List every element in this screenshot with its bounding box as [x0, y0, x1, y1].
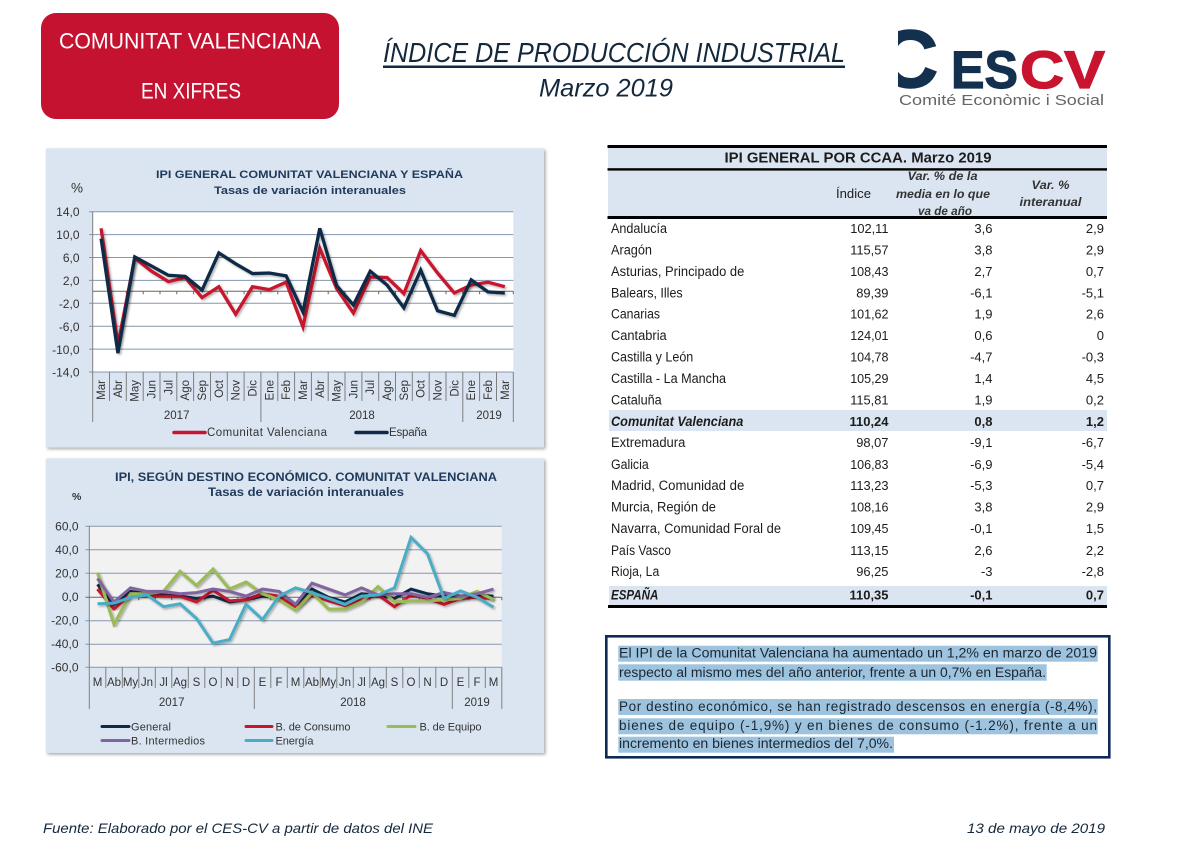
- y axis labels: -2,0: [59, 297, 80, 311]
- month labels: Oct: [416, 379, 428, 398]
- region names: Comunitat Valenciana: [611, 414, 744, 429]
- callout: summary text: respecto al mismo mes del año anterior, frente a un 0,7% en España.: [619, 665, 1046, 680]
- legend: General: [131, 722, 171, 734]
- year labels: 2018: [349, 410, 375, 422]
- footer: date: 13 de mayo de 2019: [967, 820, 1105, 836]
- year labels: 2019: [476, 410, 502, 422]
- year labels: 2019: [464, 697, 490, 709]
- panel: IPI general chart: [46, 148, 544, 448]
- table header: [608, 145, 1107, 219]
- legend: Energía: [276, 736, 314, 748]
- year labels: [164, 410, 502, 422]
- table bottom rule: [608, 605, 1107, 608]
- column: variación interanual: 0: [1097, 328, 1104, 343]
- callout: summary text: [606, 636, 1109, 757]
- column: variación interanual: 2,6: [1086, 306, 1104, 322]
- year labels: [159, 697, 490, 709]
- month labels: Abr: [315, 380, 327, 398]
- column: variación interanual: -5,1: [1082, 286, 1104, 300]
- column: variación media: -3: [981, 564, 992, 579]
- column: índice: 124,01: [850, 328, 888, 343]
- column: índice: 102,11: [850, 221, 888, 236]
- month labels: F: [473, 677, 481, 689]
- line: España: [101, 228, 505, 353]
- month labels: Ab: [305, 677, 319, 689]
- panel: IPI por destino económico chart: [46, 458, 544, 753]
- chart heading: IPI GENERAL COMUNITAT VALENCIANA Y ESPAÑA: [156, 168, 463, 181]
- region names: Cataluña: [611, 392, 662, 408]
- column: variación media: 3,8: [974, 242, 992, 258]
- column: variación interanual: -0,3: [1082, 350, 1104, 364]
- y axis labels: -14,0: [52, 366, 80, 380]
- month labels: Dic: [449, 380, 461, 397]
- column: variación media: -6,1: [970, 286, 992, 300]
- legend: [102, 722, 482, 748]
- column: índice: 115,57: [850, 242, 888, 258]
- column: variación media: 1,9: [974, 306, 992, 322]
- column: índice: 113,23: [850, 478, 888, 493]
- legend: [174, 427, 428, 439]
- month labels: May: [130, 380, 142, 402]
- footer: source: Fuente: Elaborado por el CES-CV a partir de datos del INE: [43, 820, 434, 836]
- month labels: My: [123, 677, 138, 689]
- chart heading: Tasas de variación interanuales: [208, 487, 404, 499]
- logo: CES CV: CV: [1020, 41, 1105, 100]
- month labels: Jl: [159, 677, 168, 689]
- callout: summary text: Por destino económico, se han registrado descensos en energía (-8,4%),: [619, 699, 1097, 714]
- month labels: Sep: [197, 380, 209, 400]
- month labels: Jn: [141, 677, 153, 689]
- column: variación interanual: 1,2: [1086, 414, 1104, 429]
- column: variación interanual: 4,5: [1086, 371, 1104, 386]
- month labels: O: [407, 677, 416, 689]
- table header: IPI GENERAL POR CCAA. Marzo 2019: [724, 150, 992, 166]
- month labels: Feb: [483, 380, 495, 400]
- column: variación interanual: 2,9: [1086, 221, 1104, 236]
- y axis labels: -20,0: [51, 614, 79, 628]
- month labels: Ab: [107, 677, 121, 689]
- badge: Comunitat Valenciana en xifres: COMUNITAT VALENCIANA: [59, 28, 321, 54]
- column: variación media: 1,4: [974, 371, 992, 386]
- column: variación media: 3,8: [974, 500, 992, 515]
- month labels: Oct: [214, 379, 226, 398]
- region names: Aragón: [611, 242, 652, 258]
- column: variación interanual: 2,9: [1086, 500, 1104, 515]
- legend: B. de Equipo: [420, 722, 482, 734]
- logo: CES CV: Comité Econòmic i Social: [899, 93, 1104, 109]
- table header: media en lo que: [896, 187, 990, 201]
- column: índice: [850, 221, 889, 602]
- month labels: E: [457, 677, 465, 689]
- column: variación interanual: -5,4: [1082, 457, 1104, 472]
- y axis labels: -6,0: [59, 320, 80, 334]
- column: índice: 113,15: [850, 543, 888, 558]
- month labels: Ago: [180, 380, 192, 400]
- month labels: Jul: [365, 380, 377, 395]
- legend: Comunitat Valenciana: [207, 427, 328, 439]
- month labels: [96, 379, 512, 402]
- month labels: Jun: [348, 380, 360, 399]
- column: variación media: -0,1: [970, 521, 992, 536]
- month labels: Abr: [113, 380, 125, 398]
- column: variación interanual: 0,2: [1086, 392, 1104, 408]
- region names: Castilla y León: [611, 350, 693, 364]
- month labels: May: [332, 380, 344, 402]
- month labels: Mar: [96, 380, 108, 400]
- column: variación media: 2,6: [974, 543, 992, 558]
- chart heading: [71, 168, 463, 197]
- y axis labels: -10,0: [52, 343, 80, 357]
- line: B. de Consumo: [98, 589, 494, 609]
- column: variación interanual: 0,7: [1086, 587, 1104, 602]
- column: variación interanual: 0,7: [1086, 264, 1104, 279]
- region names: Extremadura: [611, 435, 686, 450]
- column: variación interanual: -6,7: [1082, 435, 1104, 450]
- legend: España: [389, 427, 428, 439]
- column: variación media: 2,7: [974, 264, 992, 279]
- region names: Navarra, Comunidad Foral de: [611, 521, 781, 536]
- logo: CES CV: ES: [951, 41, 1018, 100]
- panel: table IPI general por CCAA: [608, 145, 1107, 608]
- chart heading: Tasas de variación interanuales: [214, 185, 406, 197]
- region names: Madrid, Comunidad de: [611, 478, 744, 493]
- region names: Murcia, Región de: [611, 500, 716, 515]
- callout: summary text: incremento en bienes intermedios del 7,0%.: [619, 736, 893, 751]
- y axis labels: 10,0: [56, 228, 80, 242]
- column: variación interanual: 0,7: [1086, 478, 1104, 493]
- month labels: Jun: [147, 380, 159, 399]
- year labels: 2017: [164, 410, 189, 422]
- month labels: M: [291, 677, 300, 689]
- column: variación media: [970, 221, 992, 602]
- y axis labels: [51, 520, 79, 674]
- logo: CES CV: C: [879, 14, 938, 105]
- region names: Castilla - La Mancha: [611, 371, 726, 386]
- column: índice: 106,83: [850, 457, 888, 472]
- column: variación interanual: 2,9: [1086, 242, 1104, 258]
- row highlight: España: [609, 586, 1107, 605]
- plot area and grid: [89, 212, 513, 422]
- callout: summary text: bienes de equipo (-1,9%) y en bienes de consumo (-1.2%), frente a un: [619, 718, 1097, 733]
- column: índice: 105,29: [850, 371, 888, 386]
- callout: summary text: El IPI de la Comunitat Valenciana ha aumentado un 1,2% en marzo de 2019: [619, 646, 1097, 661]
- chart heading: IPI, SEGÚN DESTINO ECONÓMICO. COMUNITAT VALENCIANA: [115, 471, 497, 484]
- column: variación media: 3,6: [974, 221, 992, 236]
- month labels: S: [193, 677, 201, 689]
- column: índice: 108,16: [850, 500, 888, 515]
- month labels: Mar: [500, 380, 512, 400]
- plot area and grid: [86, 526, 502, 709]
- year labels: 2018: [340, 697, 366, 709]
- month labels: D: [242, 677, 250, 689]
- y axis labels: [52, 205, 80, 380]
- line: B. Intermedios: [98, 578, 494, 604]
- month labels: [93, 677, 498, 689]
- y axis labels: 20,0: [55, 566, 79, 580]
- month labels: M: [489, 677, 498, 689]
- row highlight: Comunitat Valenciana: [609, 410, 1107, 431]
- legend: B. Intermedios: [131, 736, 206, 748]
- month labels: Ag: [173, 677, 187, 689]
- column: índice: 108,43: [850, 264, 888, 279]
- column: variación interanual: 2,2: [1086, 543, 1104, 558]
- region names: Canarias: [611, 306, 660, 322]
- y axis labels: 0,0: [62, 590, 79, 604]
- month labels: Ago: [382, 380, 394, 400]
- table header: Var. % de la: [908, 169, 978, 183]
- logo: CES CV: [898, 29, 1106, 105]
- month labels: Sep: [399, 380, 411, 400]
- y axis labels: 14,0: [56, 205, 80, 219]
- region names: Balears, Illes: [611, 286, 683, 300]
- table header: va de año: [918, 204, 972, 218]
- legend: B. de Consumo: [276, 722, 350, 734]
- region names: Galicia: [611, 457, 649, 472]
- month labels: My: [321, 677, 336, 689]
- column: índice: 89,39: [856, 286, 888, 300]
- column: variación interanual: 1,5: [1086, 521, 1104, 536]
- y axis labels: 2,0: [63, 274, 80, 288]
- region names: País Vasco: [611, 543, 671, 558]
- chart heading: %: [71, 180, 83, 196]
- region names: Rioja, La: [611, 564, 660, 579]
- month labels: Mar: [298, 380, 310, 400]
- column: variación media: -5,3: [970, 478, 992, 493]
- table header: interanual: [1020, 195, 1082, 209]
- badge: Comunitat Valenciana en xifres: EN XIFRES: [141, 78, 241, 104]
- column: variación media: -6,9: [970, 457, 992, 472]
- column: índice: 98,07: [856, 435, 888, 450]
- column: índice: 115,81: [850, 392, 888, 408]
- y axis labels: -40,0: [51, 637, 79, 651]
- region names: Asturias, Principado de: [611, 264, 744, 279]
- y axis labels: 6,0: [63, 251, 80, 265]
- table header: Índice: [836, 186, 871, 201]
- column: variación media: 0,8: [974, 414, 992, 429]
- month labels: E: [259, 677, 267, 689]
- column: índice: 110,35: [850, 587, 888, 602]
- column: variación media: -9,1: [970, 435, 992, 450]
- chart heading: [72, 471, 497, 503]
- year labels: 2017: [159, 697, 184, 709]
- line: General: [98, 584, 494, 607]
- y axis labels: 60,0: [55, 520, 79, 534]
- region names: ESPAÑA: [611, 587, 658, 602]
- region names: [611, 221, 781, 602]
- month labels: Jul: [163, 380, 175, 395]
- month labels: Ag: [371, 677, 385, 689]
- column: variación interanual: [1082, 221, 1104, 602]
- line: B. de Equipo: [98, 569, 494, 624]
- month labels: O: [209, 677, 218, 689]
- subtitle: Marzo 2019: [539, 74, 673, 102]
- column: índice: 110,24: [850, 414, 889, 429]
- y axis labels: 40,0: [55, 543, 79, 557]
- month labels: Dic: [248, 380, 260, 397]
- month labels: F: [275, 677, 283, 689]
- month labels: Ene: [466, 380, 478, 400]
- month labels: Nov: [432, 380, 444, 400]
- column: variación media: -4,7: [970, 350, 992, 364]
- line: Energía: [98, 537, 494, 643]
- month labels: Feb: [281, 380, 293, 400]
- month labels: N: [423, 677, 432, 689]
- badge: Comunitat Valenciana en xifres: [41, 13, 339, 119]
- line: Comunitat Valenciana: [101, 228, 505, 345]
- column: índice: 109,45: [850, 521, 888, 536]
- title: ÍNDICE DE PRODUCCIÓN INDUSTRIAL: [383, 37, 845, 68]
- month labels: S: [391, 677, 399, 689]
- month labels: M: [93, 677, 102, 689]
- column: índice: 101,62: [850, 306, 888, 322]
- table header: Var. %: [1032, 178, 1070, 192]
- chart heading: %: [72, 491, 82, 503]
- month labels: D: [440, 677, 448, 689]
- y axis labels: -60,0: [51, 660, 79, 674]
- month labels: N: [225, 677, 234, 689]
- region names: Andalucía: [611, 221, 667, 236]
- column: índice: 96,25: [856, 564, 888, 579]
- month labels: Ene: [264, 380, 276, 400]
- month labels: Nov: [231, 380, 243, 400]
- column: índice: 104,78: [850, 350, 888, 364]
- region names: Cantabria: [611, 328, 667, 343]
- column: variación media: 0,6: [974, 328, 992, 343]
- column: variación interanual: -2,8: [1082, 564, 1104, 579]
- month labels: Jl: [357, 677, 366, 689]
- column: variación media: -0,1: [970, 587, 992, 602]
- column: variación media: 1,9: [974, 392, 992, 408]
- month labels: Jn: [339, 677, 351, 689]
